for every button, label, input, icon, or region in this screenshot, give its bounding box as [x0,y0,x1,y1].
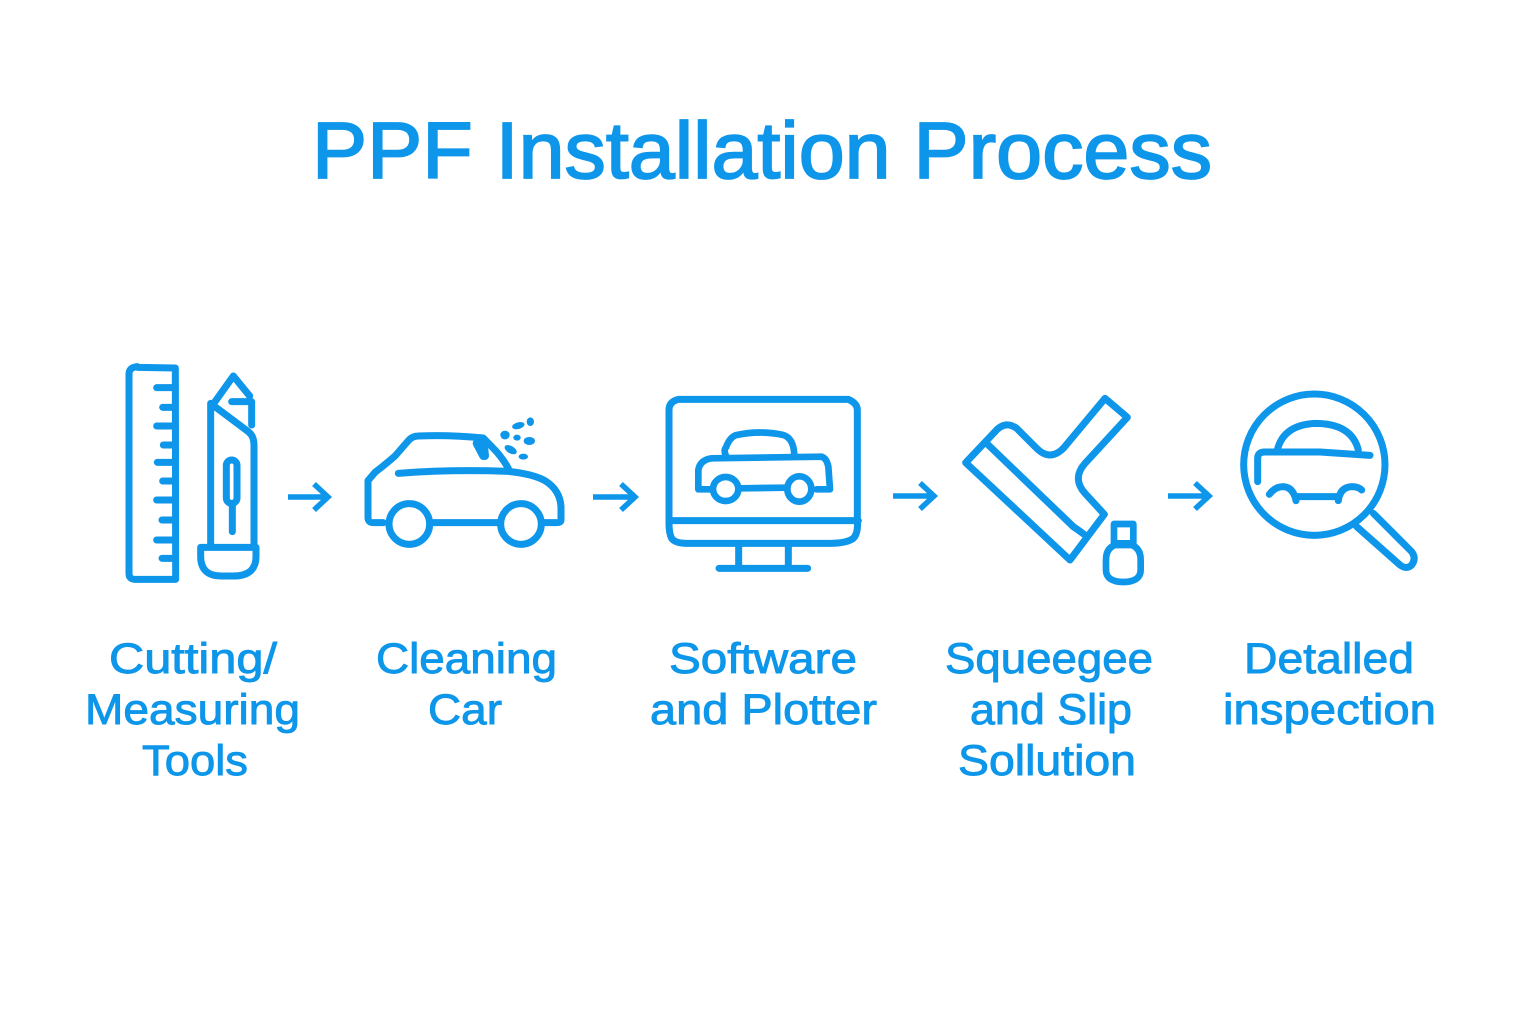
arrow 4 [1168,483,1209,509]
label: cleaning car [376,635,557,734]
label: squeegee and slip sollution [945,635,1153,785]
arrow 2 [593,484,635,510]
water droplets [500,417,535,460]
title: PPF Installation Process [312,106,1212,195]
squeegee [966,398,1127,560]
label: cutting/measuring tools: Cutting/ [109,635,277,683]
label: cleaning car: Cleaning [376,635,557,683]
label: squeegee and slip sollution: Squeegee [945,635,1153,683]
magnifying glass [1244,394,1414,567]
label: detailed inspection: Detalled [1244,635,1414,683]
label: cutting/measuring tools [85,635,300,785]
car body [368,436,561,544]
spray bottle [1106,524,1141,582]
label: squeegee and slip sollution: and Slip [970,686,1132,734]
label: software and plotter: Software [669,635,857,683]
icon: magnifying glass inspecting car [1244,394,1414,567]
icon: monitor with car (software and plotter) [669,399,858,568]
arrow 3 [893,483,934,509]
icon: ruler and cutting knife [129,367,256,579]
monitor [669,399,858,568]
car in lens [1258,423,1370,501]
cutting knife [201,376,256,576]
label: detailed inspection: inspection [1223,686,1436,734]
label: cutting/measuring tools: Measuring [85,686,300,734]
label: software and plotter [650,635,877,734]
label: squeegee and slip sollution: Sollution [958,737,1136,785]
label: cleaning car: Car [428,686,502,734]
icon: cleaning car [368,417,561,544]
icon: squeegee and slip solution bottle [966,398,1141,582]
arrow 1 [288,484,328,510]
car on screen [698,432,830,502]
label: cutting/measuring tools: Tools [142,737,248,785]
label: software and plotter: and Plotter [650,686,877,734]
label: detailed inspection [1223,635,1436,734]
ruler [129,367,176,579]
